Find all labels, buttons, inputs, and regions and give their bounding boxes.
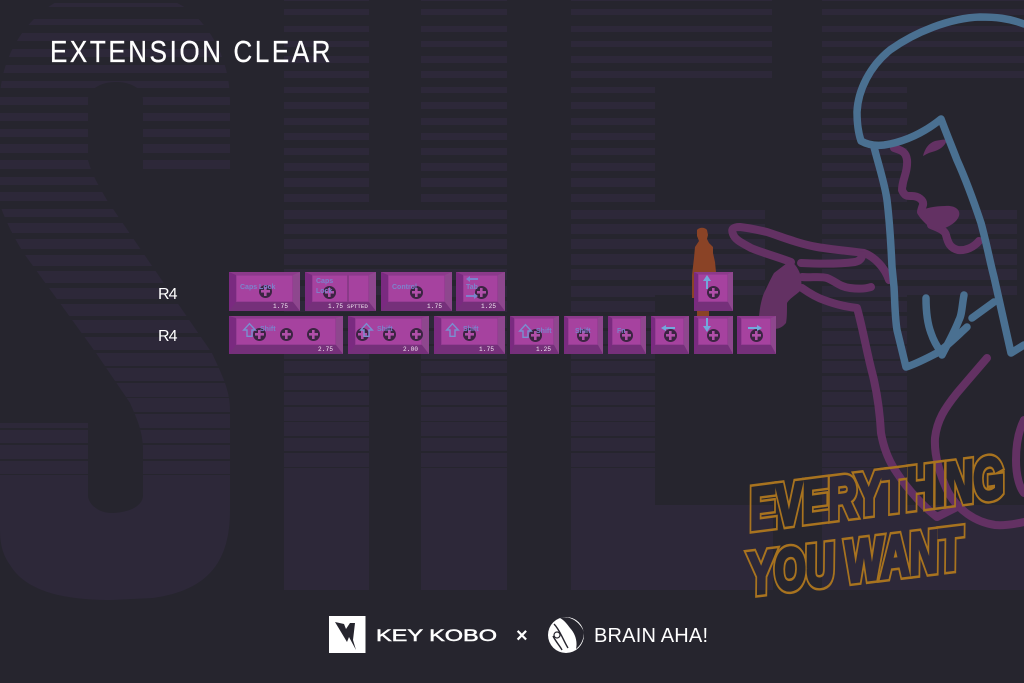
key: Shift 2.00 [348,316,429,354]
key: Shift 1.25: Shift [536,328,552,335]
key: split Caps Lock 1.75: Lock [316,288,332,295]
key: Tab 1.25: 1.25 [481,303,496,310]
cross mark: × [516,625,528,647]
key: Shift 2.00: 2.00 [403,346,418,353]
icon: standing silhouette [692,228,716,317]
row label: R4 lower: R4 [158,328,177,345]
key: Shift 1.00: Shift [575,328,591,335]
keycap row two [229,316,776,354]
key: Caps Lock 1.75: 1.75 [273,303,288,310]
key: Caps Lock 1.75: Caps Lock [240,284,275,291]
key: Shift 1.75: Shift [463,326,479,333]
key: split Caps Lock 1.75 [305,272,376,311]
key: Control 1.75: Control [392,284,417,291]
key: Control 1.75: 1.75 [427,303,442,310]
key: Shift 2.75: Shift [260,326,276,333]
key: Tab 1.25: Tab [466,284,478,291]
key: left arrow [651,316,689,354]
key: Shift 1.25 [510,316,559,354]
key: Shift 1.75 [434,316,505,354]
key: Shift 2.75 [229,316,343,354]
row label: R4 upper: R4 [158,286,177,303]
keycap row one [229,272,733,311]
purple body lines [732,148,1024,525]
key: up arrow [694,272,733,311]
purple palm and face fills [759,140,959,329]
key: Shift 1.75: 1.75 [479,346,494,353]
title: EXTENSION CLEAR [50,34,333,69]
key: Shift 1.00 [564,316,603,354]
key: Tab 1.25 [456,272,505,311]
brand: Brain Aha: BRAIN AHA! [594,625,708,647]
icon: Key Kobo logo [329,616,366,653]
key: Control 1.75 [381,272,452,311]
footer logos [329,616,708,653]
key: down arrow [694,316,733,354]
key: Caps Lock 1.75 [229,272,300,311]
key: right arrow [737,316,776,354]
key: Fn [608,316,646,354]
key: split Caps Lock 1.75: Caps [316,278,333,285]
blue hair and hand lines [857,17,1024,367]
slogan: everything you want [743,453,1006,598]
key: Fn: Fn [617,328,626,335]
key: split Caps Lock 1.75: SPTTED [347,303,368,310]
key: Shift 2.00: Shift [377,326,393,333]
icon: Brain Aha logo [548,617,584,653]
key: split Caps Lock 1.75: 1.75 [328,303,343,310]
brand: Key Kobo: KEY KOBO [376,626,497,645]
key: Shift 1.25: 1.25 [536,346,551,353]
key: Shift 2.75: 2.75 [318,346,333,353]
